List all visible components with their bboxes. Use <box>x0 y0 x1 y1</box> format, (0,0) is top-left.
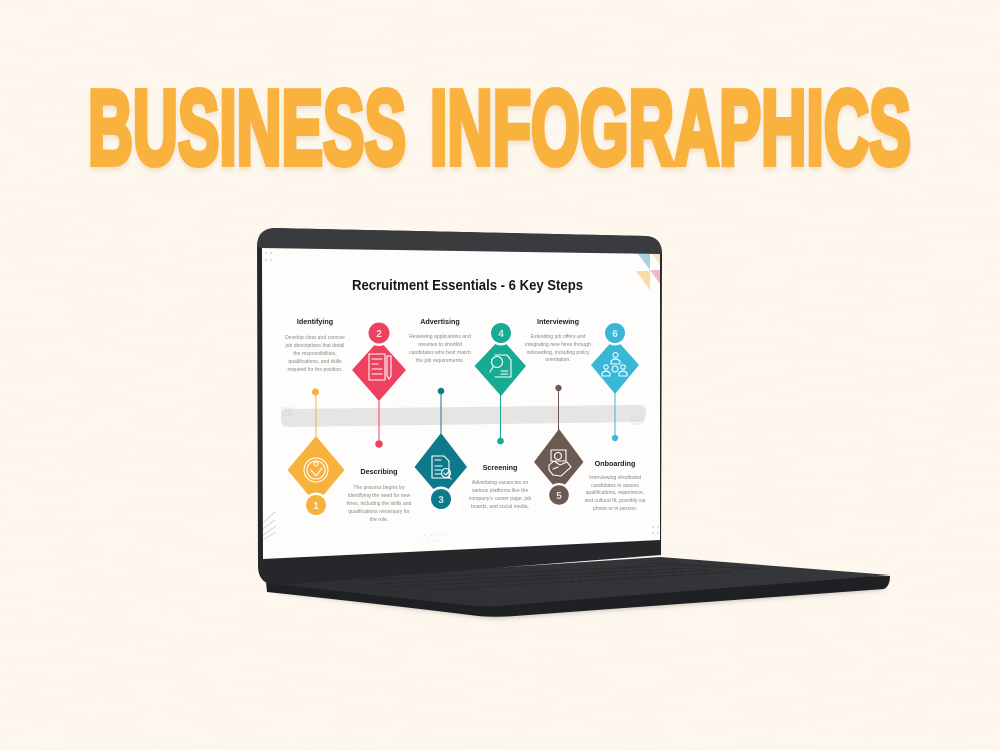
text: Onboarding: candidates to assess <box>591 483 639 489</box>
text: Identifying: required for the position. <box>288 367 342 373</box>
text: Describing <box>347 467 412 523</box>
slide title: Recruitment Essentials - 6 Key Steps <box>352 277 583 294</box>
text: Describing: hires, including the skills and <box>347 501 412 507</box>
timeline band <box>281 405 646 427</box>
text: Onboarding <box>585 459 646 512</box>
text: Screening: Screening <box>483 463 517 472</box>
text: Interviewing <box>525 317 591 363</box>
title: BUSINESS <box>88 73 406 191</box>
text: Describing: The process begins by <box>353 485 405 491</box>
text: Screening: company's career page, job <box>469 496 531 502</box>
step 6: Onboarding <box>591 320 639 441</box>
text: Advertising: candidates who best match <box>409 350 471 356</box>
text: Advertising: the job requirements. <box>416 358 464 364</box>
dots bottom <box>421 534 444 542</box>
text: Identifying: Develop clear and concise <box>285 335 345 341</box>
laptop base front edge <box>266 576 890 617</box>
decorative hatch lines <box>263 512 276 540</box>
text: Interviewing: orientation. <box>545 357 571 363</box>
step 1: Identifying: 1 <box>313 501 319 512</box>
text: Onboarding: Onboarding <box>595 459 635 468</box>
text: Describing: qualifications necessary for <box>348 509 410 515</box>
text: Interviewing: Interviewing <box>537 317 579 326</box>
step 5: Interviewing <box>534 385 584 507</box>
laptop keyboard <box>362 563 760 590</box>
text: Interviewing: integrating new hires through <box>525 342 591 348</box>
corner triangles <box>636 254 660 290</box>
step 3: Advertising <box>414 388 467 512</box>
step 1: Identifying <box>288 388 344 518</box>
text: Advertising: Reviewing applications and <box>409 334 471 340</box>
screen: recruitment slide <box>262 248 660 559</box>
laptop shadow <box>275 585 885 619</box>
step 4: Screening: 4 <box>498 329 504 340</box>
laptop lid <box>257 228 662 585</box>
text: Describing: the role. <box>370 517 388 523</box>
text: Interviewing: onboarding, including policy <box>527 350 590 356</box>
step 2: Describing: 2 <box>376 329 382 340</box>
text: Onboarding: qualifications, experience, <box>586 490 644 496</box>
text: Onboarding: and cultural fit, possibly via <box>585 498 646 504</box>
step 4: Screening <box>474 320 526 444</box>
step 6: Onboarding: 6 <box>612 329 618 340</box>
title <box>88 69 911 191</box>
grid decorations <box>282 408 642 424</box>
laptop <box>257 228 890 619</box>
text: Identifying: the responsibilities, <box>293 351 337 357</box>
text: Advertising: resumes to shortlist <box>418 342 463 348</box>
laptop base deck <box>266 557 890 606</box>
text: Screening: various platforms like the <box>472 488 528 494</box>
text: Screening: Advertising vacancies on <box>472 480 528 486</box>
step 3: Advertising: 3 <box>438 495 444 506</box>
text: Onboarding: Interviewing shortlisted <box>589 475 641 481</box>
text: Screening: boards, and social media. <box>471 504 529 510</box>
step 5: Interviewing: 5 <box>556 491 562 502</box>
title: BUSINESS <box>88 69 406 187</box>
text: Interviewing: Extending job offers and <box>531 334 586 340</box>
text: Identifying: qualifications, and skills <box>288 359 342 365</box>
text: Advertising <box>409 317 471 364</box>
text: Describing: Describing <box>360 467 398 476</box>
step 2: Describing <box>352 320 406 448</box>
text: Identifying <box>285 317 345 373</box>
text: Describing: identifying the need for new <box>348 493 410 499</box>
text: Advertising: Advertising <box>420 317 460 326</box>
text: Identifying: job descriptions that detail <box>285 343 344 349</box>
text: Onboarding: phone or in-person. <box>593 506 637 512</box>
decorative dots <box>265 252 659 534</box>
text: Identifying: Identifying <box>297 317 333 326</box>
text: Screening <box>469 463 531 510</box>
